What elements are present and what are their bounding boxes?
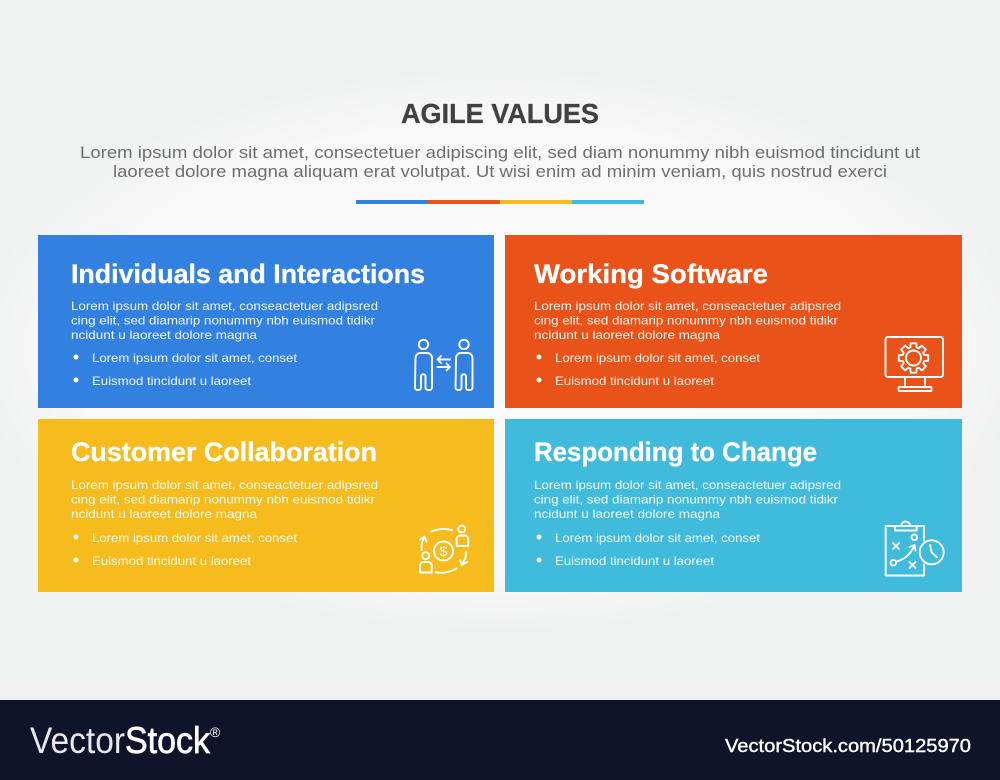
body text: cing elit, sed diamarip nonummy nbh euismod tidikr (71, 314, 375, 328)
body text: cing elit, sed diamarip nonummy nbh euismod tidikr (534, 492, 838, 506)
body text (534, 478, 841, 521)
panel: customer collaboration (38, 419, 494, 592)
bullet list: Lorem ipsum dolor sit amet, conset (92, 351, 298, 365)
bullet list: Euismod tincidunt u laoreet (555, 374, 715, 388)
bullet list: Euismod tincidunt u laoreet (92, 554, 252, 568)
logo: VectorStock: Vector (30, 720, 125, 761)
icon: money exchange between people: $ (440, 543, 448, 559)
title: AGILE VALUES (401, 98, 599, 129)
body text: cing elit, sed diamarip nonummy nbh euismod tidikr (534, 314, 838, 328)
bullet list (74, 351, 298, 388)
body text (71, 478, 378, 521)
heading: working software: Working Software (534, 259, 768, 289)
intro text: Lorem ipsum dolor sit amet, consectetuer adipiscing elit, sed diam nonummy nibh euismod tincidunt ut (80, 143, 920, 162)
bullet list: Lorem ipsum dolor sit amet, conset (555, 531, 761, 545)
footer band (0, 700, 1000, 780)
bullet list (74, 531, 298, 568)
body text (534, 299, 841, 342)
logo: VectorStock: ® (210, 724, 221, 740)
body text: Lorem ipsum dolor sit amet, conseactetuer adipsred (534, 299, 841, 313)
panel: working software (505, 235, 962, 408)
panel: individuals and interactions (38, 235, 494, 408)
body text: ncidunt u laoreet dolore magna (71, 328, 257, 342)
logo: VectorStock (30, 720, 221, 761)
bullet list (536, 351, 761, 388)
bullet list: Euismod tincidunt u laoreet (555, 554, 715, 568)
panel: responding to change (505, 419, 962, 592)
bullet list (536, 531, 761, 568)
colour underline (356, 200, 644, 204)
icon: monitor with gear (886, 337, 943, 391)
body text: Lorem ipsum dolor sit amet, conseactetuer adipsred (71, 299, 378, 313)
bullet list: Euismod tincidunt u laoreet (92, 374, 252, 388)
bullet list: Lorem ipsum dolor sit amet, conset (555, 351, 761, 365)
icon: two people exchanging (415, 340, 472, 390)
logo: VectorStock: Stock (125, 720, 210, 761)
body text: Lorem ipsum dolor sit amet, conseactetuer adipsred (534, 478, 841, 492)
body text: cing elit, sed diamarip nonummy nbh euismod tidikr (71, 492, 375, 506)
body text: Lorem ipsum dolor sit amet, conseactetuer adipsred (71, 478, 378, 492)
heading: responding to change: Responding to Change (534, 437, 817, 467)
body text (71, 299, 378, 342)
body text: ncidunt u laoreet dolore magna (534, 507, 720, 521)
icon: money exchange between people (420, 526, 468, 573)
heading: individuals and interactions: Individuals and Interactions (71, 259, 425, 289)
intro text: laoreet dolore magna aliquam erat volutpat. Ut wisi enim ad minim veniam, quis nostrud exerci (113, 162, 887, 181)
icon: clipboard strategy with clock (886, 522, 944, 576)
body text: ncidunt u laoreet dolore magna (534, 328, 720, 342)
bullet list: Lorem ipsum dolor sit amet, conset (92, 531, 298, 545)
body text: ncidunt u laoreet dolore magna (71, 507, 257, 521)
heading: customer collaboration: Customer Collaboration (71, 437, 377, 467)
image id: VectorStock.com/50125970 (725, 736, 971, 756)
intro text (80, 143, 920, 181)
